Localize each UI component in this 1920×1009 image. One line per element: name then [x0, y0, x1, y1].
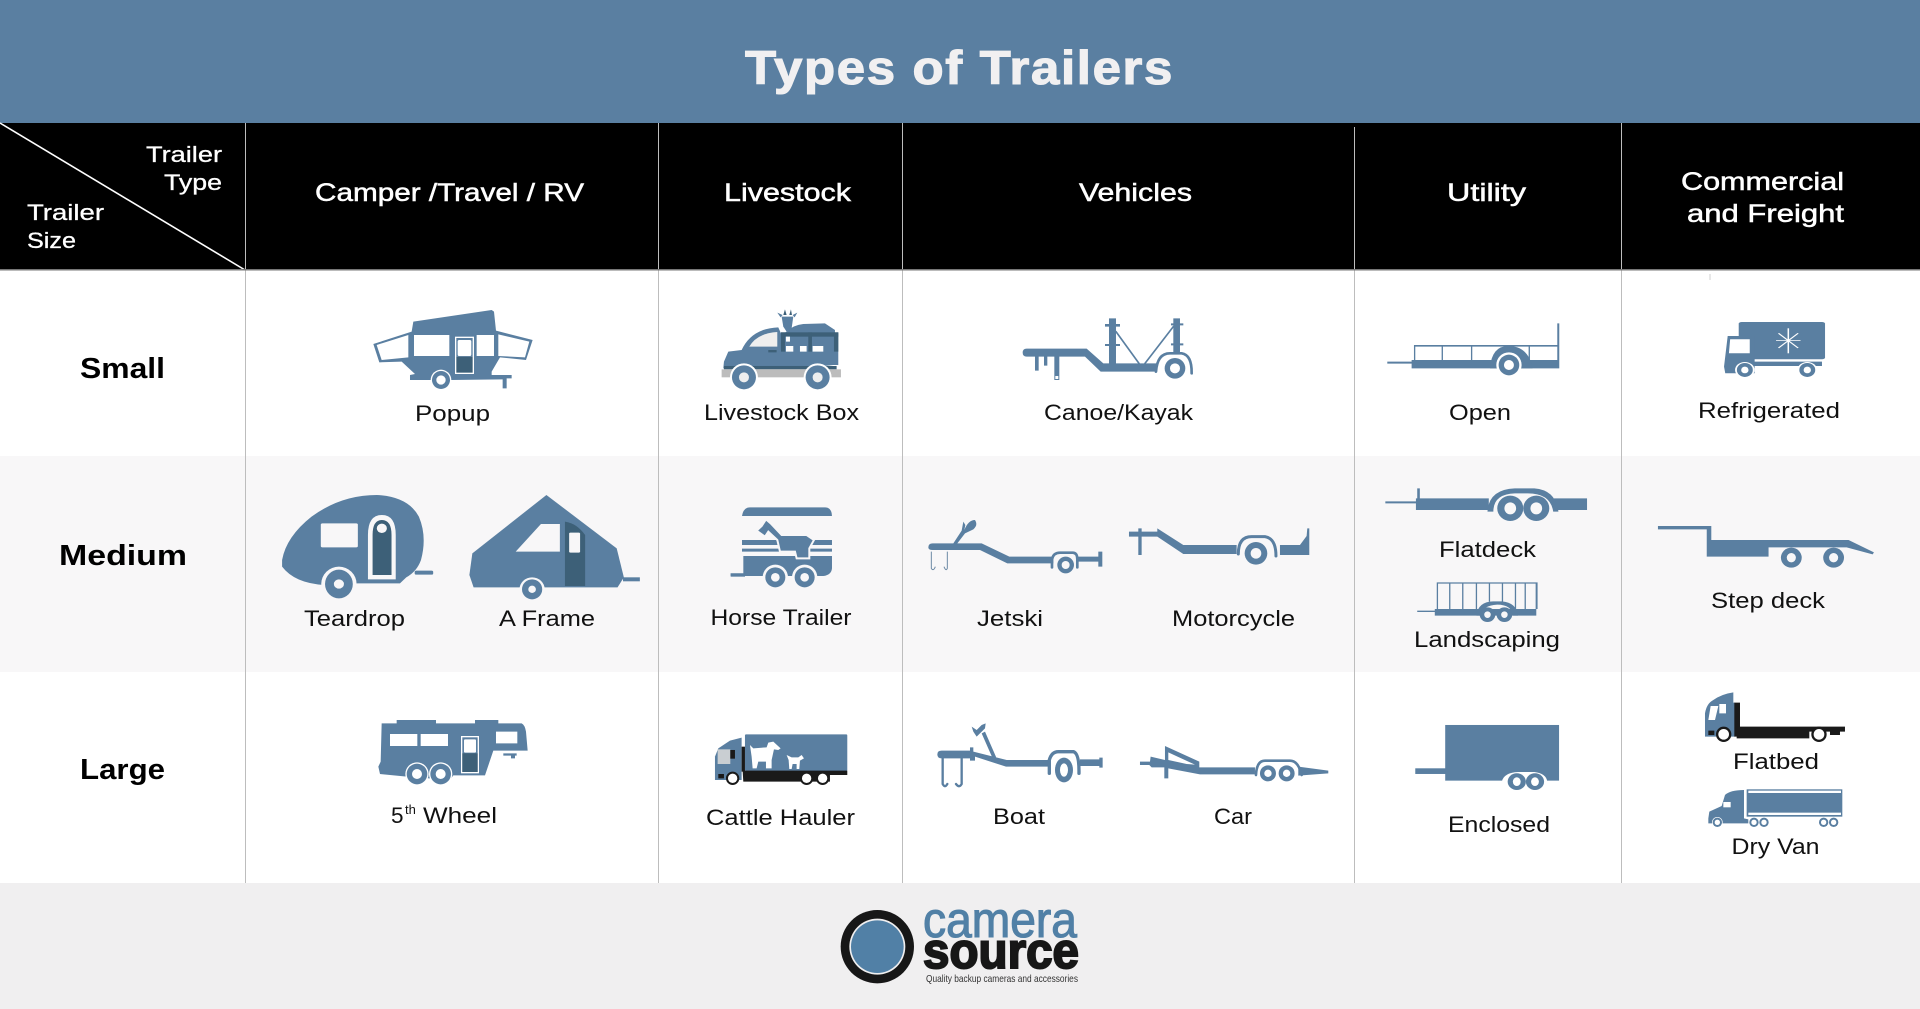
label: a frame: A Frame	[499, 606, 595, 631]
icon: boat trailer	[937, 723, 1103, 786]
label: livestock box: Livestock Box	[704, 400, 860, 425]
label: landscaping: Landscaping	[1414, 627, 1560, 652]
axis label: trailer size: Size	[27, 228, 76, 253]
icon: canoe kayak trailer	[1023, 318, 1192, 380]
label: 5th wheel: th	[405, 802, 416, 817]
axis label: trailer type: Type	[164, 170, 222, 195]
column lines	[246, 123, 1622, 883]
label: 5th wheel: Wheel	[423, 803, 497, 828]
title: Types of Trailers	[745, 41, 1174, 94]
footer panel	[0, 883, 1920, 1009]
title banner	[0, 0, 1920, 123]
axis label: trailer type: Trailer	[146, 142, 223, 167]
row label: large: Large	[80, 754, 165, 786]
icon: a frame camper	[469, 495, 640, 601]
label: jetski: Jetski	[977, 606, 1043, 631]
axis label: trailer size: Trailer	[27, 200, 105, 225]
icon: enclosed trailer	[1415, 725, 1559, 790]
label: popup: Popup	[415, 401, 490, 426]
column heading: commercial and freight: Commercial	[1681, 168, 1844, 196]
icon: step deck trailer	[1658, 526, 1874, 568]
icon: livestock box	[722, 309, 841, 391]
row label: small: Small	[80, 353, 165, 385]
icon: jetski trailer	[928, 520, 1102, 573]
label: enclosed: Enclosed	[1448, 812, 1550, 837]
label: motorcycle: Motorcycle	[1172, 606, 1295, 631]
icon: open trailer	[1387, 323, 1559, 378]
logo: camera lens ring	[841, 910, 914, 983]
icon: landscaping trailer	[1417, 582, 1538, 622]
label: 5th wheel: 5	[391, 803, 404, 828]
icon: car trailer	[1140, 746, 1328, 781]
column heading: vehicles: Vehicles	[1079, 179, 1192, 207]
row backgrounds	[0, 270, 1920, 883]
label: boat: Boat	[993, 804, 1046, 829]
icon: teardrop camper	[282, 495, 433, 601]
label: 5th wheel	[391, 802, 497, 828]
icon: horse trailer	[731, 507, 832, 590]
label: flatdeck: Flatdeck	[1439, 537, 1537, 562]
icon: dry van truck	[1708, 789, 1842, 828]
label: teardrop: Teardrop	[304, 606, 405, 631]
label: canoe kayak: Canoe/Kayak	[1044, 400, 1194, 425]
icon: flatdeck trailer	[1385, 488, 1587, 521]
label: dry van: Dry Van	[1732, 834, 1820, 859]
logo: camera wordmark: camera	[923, 892, 1077, 948]
label: horse trailer: Horse Trailer	[710, 605, 852, 630]
column heading: livestock: Livestock	[724, 179, 852, 207]
column heading: utility: Utility	[1447, 179, 1527, 207]
logo: tagline: Quality backup cameras and accessories	[926, 973, 1078, 985]
label: refrigerated: Refrigerated	[1698, 398, 1840, 423]
column heading: camper: Camper /Travel / RV	[315, 179, 584, 207]
icon: fifth wheel camper	[378, 720, 528, 786]
icon: cattle hauler truck	[715, 734, 847, 785]
label: car: Car	[1214, 804, 1253, 829]
icon: refrigerated truck	[1724, 322, 1825, 378]
label: flatbed: Flatbed	[1733, 749, 1819, 774]
logo: source wordmark: source	[923, 923, 1079, 979]
icon: motorcycle trailer	[1129, 528, 1309, 565]
label: open: Open	[1449, 400, 1511, 425]
column heading: commercial and freight: and Freight	[1687, 200, 1844, 228]
table header bar	[0, 123, 1920, 270]
label: cattle hauler: Cattle Hauler	[706, 805, 856, 830]
icon: popup	[373, 310, 533, 390]
row label: medium: Medium	[59, 540, 187, 572]
axis label: trailer size	[27, 200, 105, 253]
icon: flatbed truck	[1705, 692, 1845, 742]
axis label: trailer type	[146, 142, 223, 195]
column heading: commercial and freight	[1681, 168, 1844, 228]
label: step deck: Step deck	[1711, 588, 1826, 613]
